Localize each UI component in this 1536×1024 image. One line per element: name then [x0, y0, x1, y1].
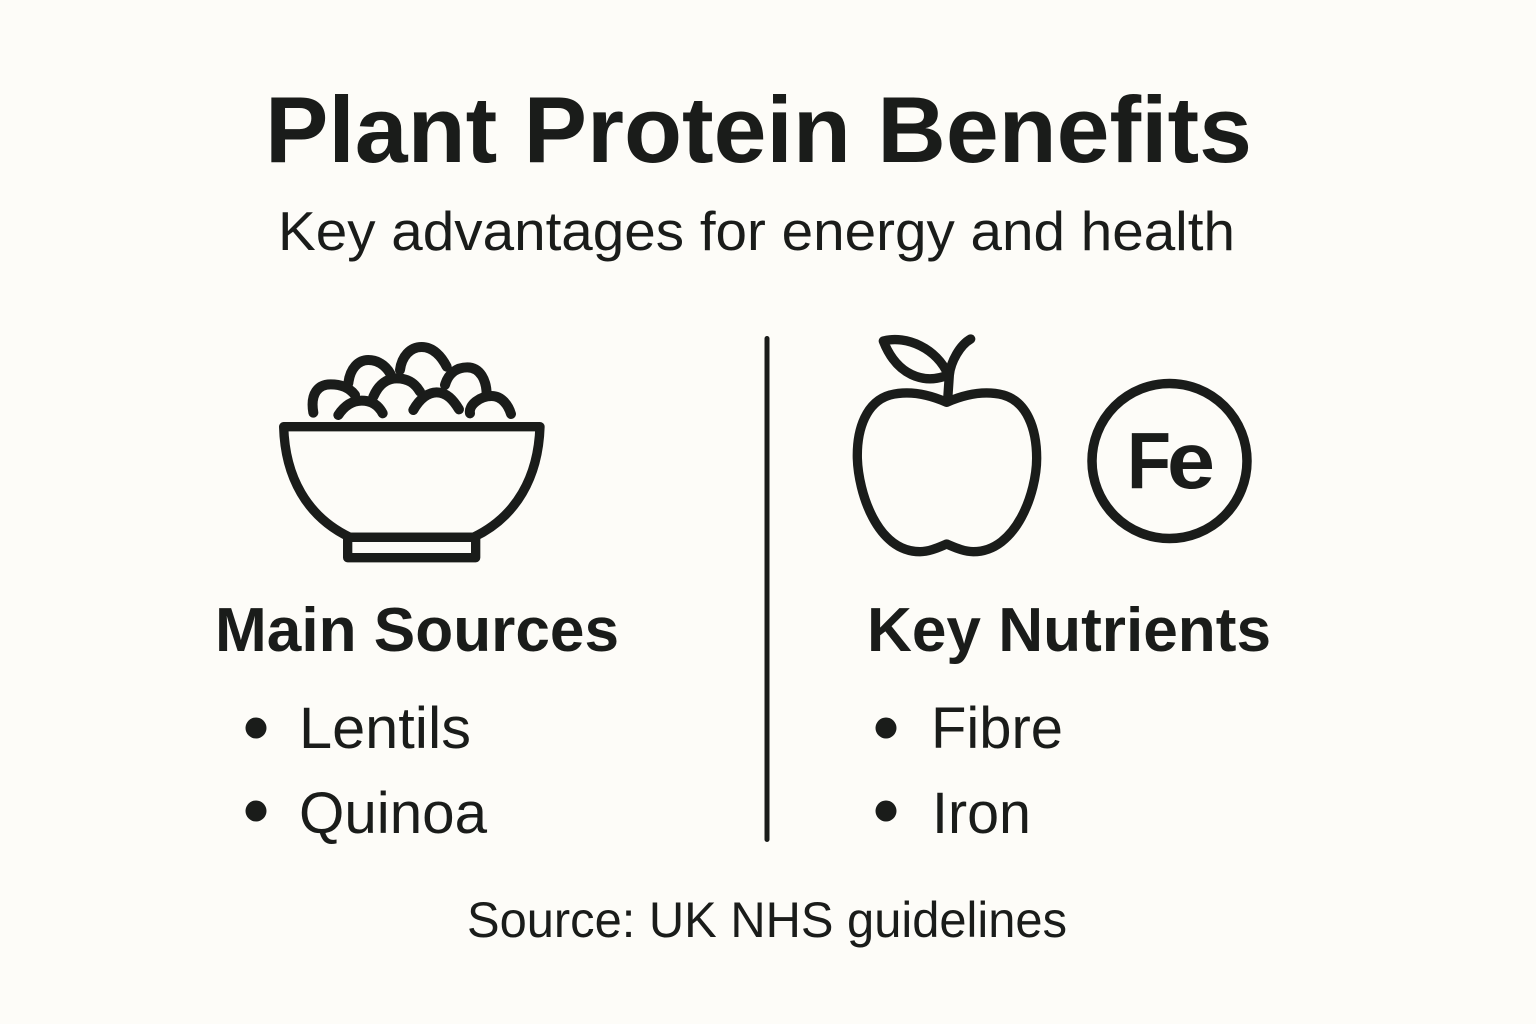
source note: Source: UK NHS guidelines: [467, 892, 1067, 948]
icon: iron symbol: [1092, 384, 1247, 538]
icon: apple: [857, 339, 1037, 552]
list item: iron: [876, 781, 1031, 846]
list item: iron: Iron: [932, 781, 1031, 846]
list item: lentils: Lentils: [299, 696, 471, 761]
heading: main sources: Main Sources: [215, 596, 619, 665]
icon: iron symbol: F: [1127, 416, 1171, 505]
list item: quinoa: Quinoa: [299, 781, 488, 846]
panel: key nutrients: [857, 339, 1271, 846]
title: Plant Protein Benefits: [265, 77, 1252, 182]
panel: main sources: [215, 347, 619, 846]
icon: bowl of lentils and quinoa: [284, 347, 540, 558]
icon: iron symbol: e: [1167, 416, 1215, 505]
divider: [764, 336, 770, 842]
list item: fibre: Fibre: [931, 696, 1063, 761]
heading: key nutrients: Key Nutrients: [867, 596, 1271, 665]
subtitle: Key advantages for energy and health: [278, 200, 1235, 262]
